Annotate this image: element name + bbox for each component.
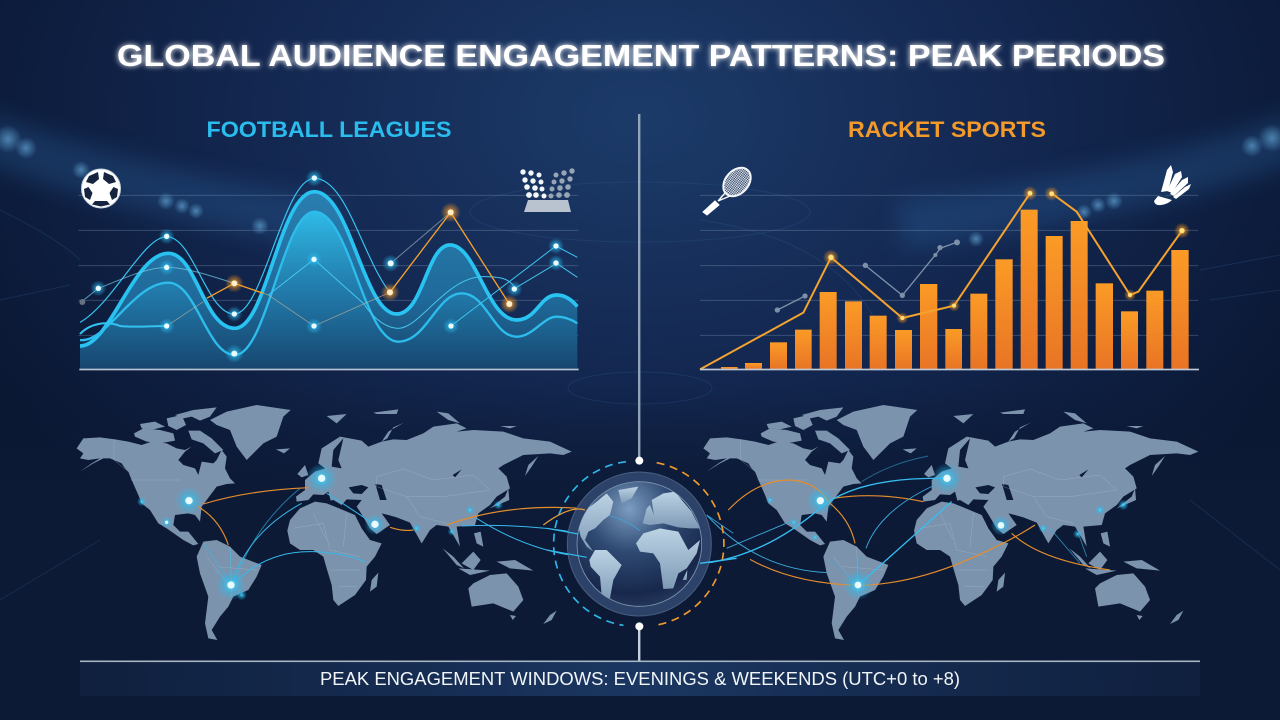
area: main audience curve <box>80 192 577 369</box>
orange data points <box>225 202 519 313</box>
heading: racket sports: RACKET SPORTS <box>848 117 1046 142</box>
area: second audience curve <box>80 212 577 369</box>
orange trend line <box>700 193 1182 369</box>
line: upper thin cyan <box>80 178 390 322</box>
arcs across the globe <box>543 509 737 563</box>
dashed ring: orange <box>655 463 724 625</box>
orange bars <box>721 210 1189 369</box>
line: pale connector <box>82 267 234 302</box>
city glows <box>766 463 1129 600</box>
line: main curve <box>80 192 577 346</box>
icon: shuttlecock <box>1154 165 1191 205</box>
heading: football leagues: FOOTBALL LEAGUES <box>206 117 452 142</box>
panel: right world map <box>703 405 1198 640</box>
footer band <box>80 660 1200 696</box>
center divider line <box>638 114 640 661</box>
connection arcs: cyan <box>203 488 580 585</box>
baseline <box>700 369 1199 370</box>
grey trend lines <box>775 239 960 313</box>
panel: racket sports bar chart <box>700 186 1199 370</box>
cyan data points <box>79 169 564 363</box>
connection arcs: orange <box>198 488 580 545</box>
continents <box>578 487 700 602</box>
baseline <box>79 369 579 370</box>
icon: stadium crowd <box>520 168 575 212</box>
panel: left world map <box>77 405 580 640</box>
connection arcs: orange <box>728 480 1110 585</box>
footer text: PEAK ENGAGEMENT WINDOWS: EVENINGS & WEEKENDS (UTC+0 to +8) <box>320 669 960 689</box>
connector nodes <box>635 457 643 630</box>
city glows <box>137 463 503 600</box>
line: orange segment <box>207 212 509 304</box>
line: mid cyan <box>268 259 577 328</box>
right map connections <box>700 456 1129 600</box>
dashed ring: cyan <box>554 462 626 625</box>
panel: football line chart <box>78 169 579 370</box>
icon: football <box>82 169 120 208</box>
globe <box>543 457 737 630</box>
connection arcs: cyan <box>700 478 952 585</box>
title: GLOBAL AUDIENCE ENGAGEMENT PATTERNS: PEAK PERIODS <box>117 38 1165 73</box>
sphere <box>577 482 702 606</box>
outer halo ring <box>567 472 711 616</box>
icon: tennis racket <box>703 162 756 215</box>
line: second curve <box>80 212 577 355</box>
orange trend points <box>823 186 1190 324</box>
